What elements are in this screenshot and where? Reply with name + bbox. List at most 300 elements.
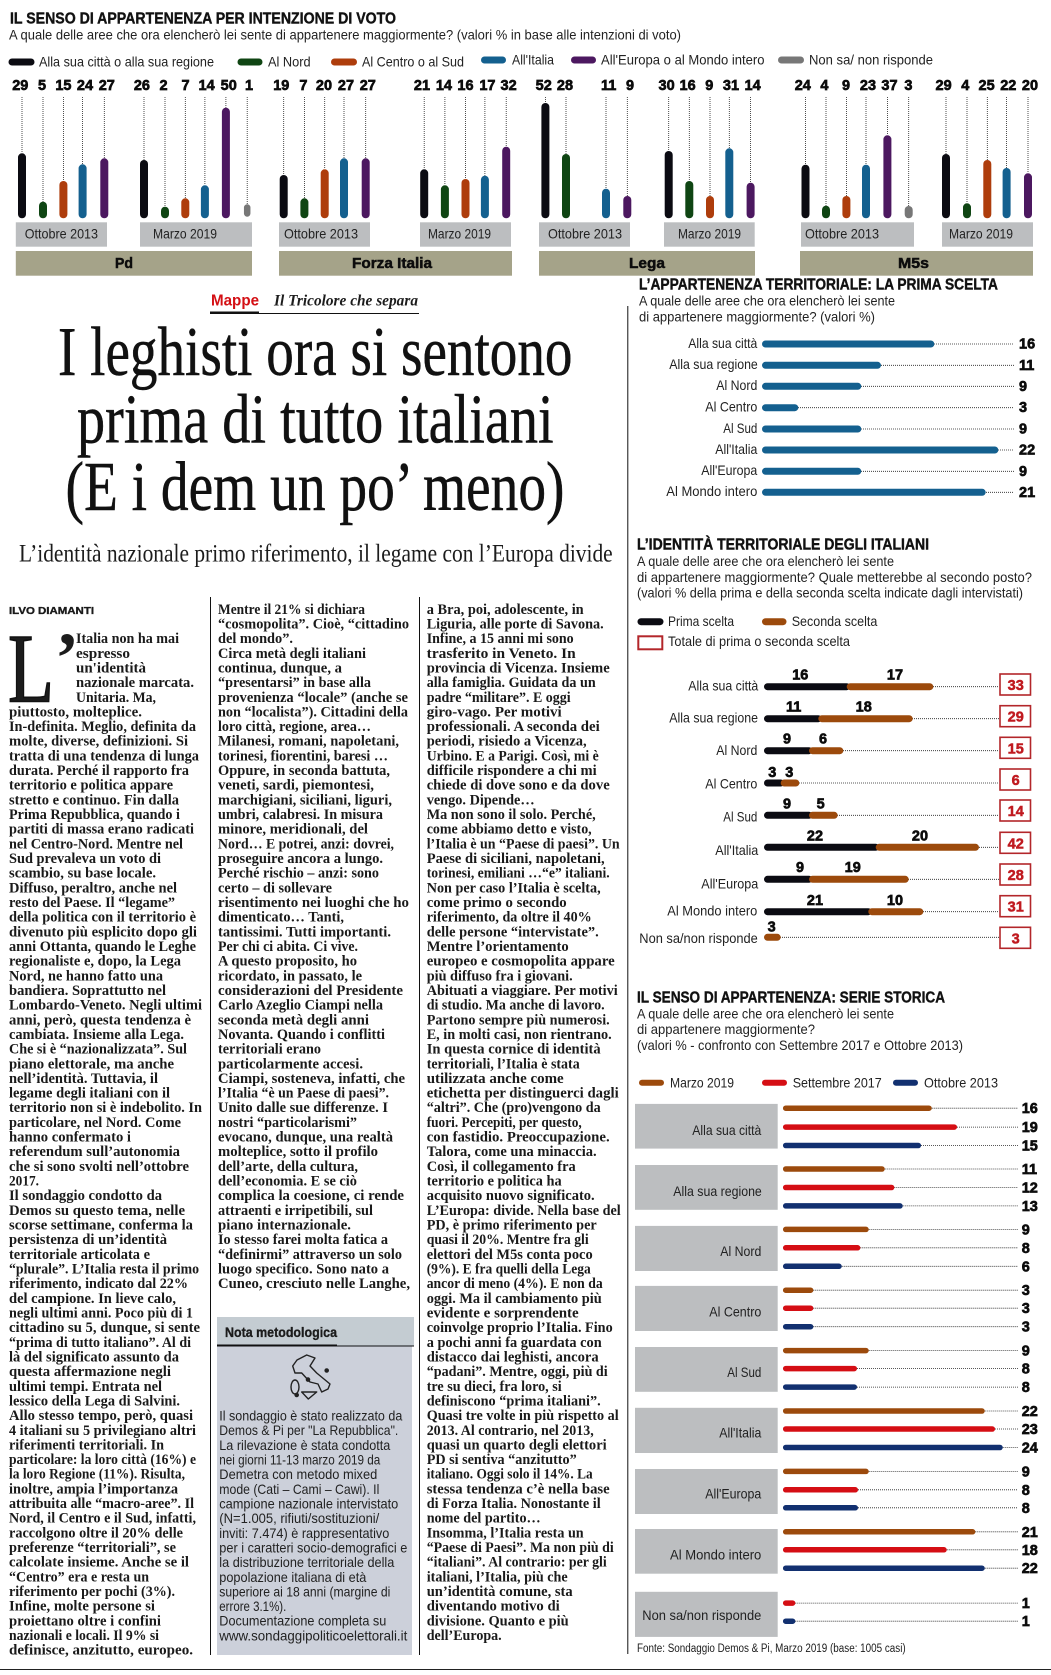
article column 2: provenienza “locale” (anche se — [218, 690, 408, 706]
article column 3: quasi un quarto degli elettori — [427, 1437, 607, 1453]
bars: M5s: 9 — [842, 78, 850, 94]
article column 2 — [218, 602, 410, 1292]
heading: territorial identity: (valori % della prima e della seconda scelta indicate dagli intervistati) — [637, 584, 1023, 600]
bar chart: first choice: Al Centro — [705, 398, 757, 414]
legend: first and second choice — [638, 613, 877, 649]
legend: voting intention: All'Italia — [512, 52, 554, 68]
bar chart: historical series: 6 — [1022, 1259, 1030, 1275]
total boxes: 6 — [1012, 773, 1020, 789]
bar chart: historical series: 3 — [1022, 1320, 1030, 1336]
note text: inviti: 7.474) è rappresentativo — [219, 1525, 389, 1541]
kicker: Mappe: Il Tricolore che separa — [273, 292, 418, 310]
legend: voting intention: Non sa/ non risponde — [809, 52, 933, 68]
heading: voting intention: IL SENSO DI APPARTENENZA PER INTENZIONE DI VOTO — [10, 11, 396, 28]
bar chart: first and second choice: 10 — [887, 893, 903, 909]
bars: Pd: 5 — [38, 78, 46, 94]
bars: M5s: 37 — [881, 78, 898, 94]
article column 3: Insomma, l’Italia resta un — [427, 1525, 584, 1541]
bar chart: historical series: 8 — [1022, 1501, 1030, 1517]
article column 1: della politica con il territorio è — [9, 910, 196, 926]
panel: methodological note — [217, 1317, 414, 1655]
article column 3: provincia di Vicenza. Insieme — [427, 660, 610, 676]
article column 1: Lombardo-Veneto. Negli ultimi — [9, 998, 202, 1014]
bars: Pd: 24 — [77, 78, 93, 94]
bar chart: first choice: Al Sud — [723, 420, 757, 436]
article column 2: “presentarsi” in base alla — [218, 675, 371, 691]
article column 3: evidente e sorprendente — [427, 1305, 579, 1321]
article column 1: 4 italiani su 5 privilegiano altri — [9, 1423, 196, 1439]
drop cap: L — [8, 615, 54, 724]
article column 3: italiano. Oggi solo il 14%. La — [427, 1467, 593, 1483]
article column 1: scambio, su base locale. — [9, 866, 156, 882]
bars: Forza Italia: Ottobre 2013 — [284, 226, 358, 242]
legend: voting intention: Al Centro o al Sud — [362, 54, 464, 70]
row panels: Al Mondo intero — [670, 1546, 761, 1562]
article column 1: riferimento per pochi (3%). — [9, 1584, 175, 1600]
bar chart: first and second choice: 11 — [786, 700, 801, 716]
article column 1: “prima di tutto italiano”. Al di — [9, 1335, 191, 1351]
bars: Forza Italia: 21 — [414, 78, 430, 94]
note text: Documentazione completa su — [219, 1613, 386, 1629]
article column 1: nell’identità. Tuttavia, il — [9, 1071, 158, 1087]
article column 1: territorio non si è indebolito. In — [9, 1100, 203, 1116]
bar chart: first and second choice: 6 — [819, 731, 827, 747]
bar chart: historical series: 9 — [1022, 1464, 1030, 1480]
bars: Pd: 26 — [134, 78, 150, 94]
article column 3: come primo o secondo — [427, 895, 567, 911]
article column 3: 2013. Al contrario, nel 2013, — [427, 1423, 594, 1439]
bar chart: first and second choice: Alla sua città — [688, 678, 758, 694]
article column 3: Abituati a viaggiare. Per motivi — [427, 983, 618, 999]
article column 1: referendum sull’autonomia — [9, 1144, 180, 1160]
bars: M5s: 25 — [979, 78, 995, 94]
drop cap: ’ — [55, 618, 79, 698]
note text: errore 3.1%). — [219, 1598, 286, 1614]
bar chart: first and second choice: 5 — [817, 796, 825, 812]
bars: Forza Italia: Marzo 2019 — [428, 226, 491, 242]
article column 1: “plurale”. L’Italia resta il primo — [9, 1261, 199, 1277]
bar chart: historical series: 8 — [1022, 1483, 1030, 1499]
bars: M5s: 23 — [860, 78, 876, 94]
bar chart: first choice: All'Europa — [701, 462, 757, 478]
article column 2: Cuneo, cresciuto nelle Langhe, — [218, 1276, 410, 1292]
note heading: Nota metodologica — [225, 1324, 337, 1340]
article column 1: stretto e continuo. Fin dalla — [9, 792, 179, 808]
article column 3: alla famiglia. Guidata da un — [427, 675, 596, 691]
article column 2: loro città, regione, area… — [218, 719, 371, 735]
total boxes: 31 — [1008, 900, 1024, 916]
article column 1: preferenze “territoriali”, se — [9, 1540, 176, 1556]
article column 2: Io stesso farei molta fatica a — [218, 1232, 388, 1248]
article column 1: legame degli italiani con il — [9, 1086, 170, 1102]
bars: Lega: 28 — [557, 78, 573, 94]
bar chart: historical series: 18 — [1022, 1543, 1038, 1559]
note text: Il sondaggio è stato realizzato da — [219, 1408, 402, 1424]
bars: M5s: M5s — [898, 255, 929, 272]
article column 2: considerazioni del Presidente — [218, 983, 403, 999]
total boxes: 14 — [1008, 804, 1024, 820]
bars: Forza Italia: 32 — [501, 78, 517, 94]
heading: voting intention: A quale delle aree che ora elencherò lei sente di appartenere maggiormente? (valori % in base alle intenzioni di voto) — [9, 27, 681, 43]
article column 3: come abbiamo detto e visto, — [427, 822, 592, 838]
article column 3: Non per caso l’Italia è scelta, — [427, 880, 601, 896]
bars: M5s — [795, 78, 1038, 276]
bar chart: historical series: 12 — [1022, 1180, 1038, 1196]
bar chart: first and second choice — [639, 667, 999, 946]
bars: Forza Italia: 20 — [316, 78, 332, 94]
article column 3: divisione. Quanto e più — [427, 1613, 569, 1629]
article column 1: espresso — [76, 646, 130, 662]
article column 1: lessico della Lega di Salvini. — [9, 1393, 180, 1409]
heading: historical series — [637, 989, 963, 1053]
heading: historical series: IL SENSO DI APPARTENENZA: SERIE STORICA — [637, 989, 945, 1006]
bar chart: historical series: 11 — [1022, 1162, 1037, 1178]
bar chart: first choice — [666, 335, 1035, 501]
article column 1: Prima Repubblica, quando i — [9, 807, 180, 823]
article column 3: difficile rispondere a chi mi — [427, 763, 597, 779]
article column 3: di Forza Italia. Nonostante il — [427, 1496, 601, 1512]
article column 1: anni Ottanta, quando le Leghe — [9, 939, 196, 955]
heading: first choice — [639, 276, 998, 325]
total boxes: 15 — [1008, 741, 1024, 757]
legend: dates: Settembre 2017 — [793, 1074, 882, 1090]
article column 1: territorio e politica appare — [9, 778, 173, 794]
bars: Lega: Marzo 2019 — [678, 226, 741, 242]
article column 2: tantissimi. Tutti importanti. — [218, 924, 391, 940]
bars: Forza Italia: 27 — [338, 78, 354, 94]
bar chart: first and second choice: 9 — [783, 731, 791, 747]
article column 3: torinesi, emiliani …“e” italiani. — [427, 866, 610, 882]
bar chart: first and second choice: Al Mondo intero — [667, 902, 757, 918]
bars: Pd: 27 — [99, 78, 115, 94]
bars: Pd: 2 — [160, 78, 168, 94]
bar chart: historical series: 19 — [1022, 1120, 1038, 1136]
article column 2: Nord… E potrei, anzi: dovrei, — [218, 836, 394, 852]
article column 2: Mentre il 21% si dichiara — [218, 602, 365, 618]
bar chart: historical series: 22 — [1022, 1404, 1038, 1420]
bars: M5s: 29 — [936, 78, 952, 94]
article column 3: con fastidio. Preoccupazione. — [427, 1130, 610, 1146]
row panels: Al Nord — [720, 1243, 761, 1259]
bars: Lega: 16 — [680, 78, 696, 94]
bars: Lega: 14 — [745, 78, 761, 94]
note text: Demetra con metodo mixed — [219, 1466, 377, 1482]
article column 3: Paese di siciliani, napoletani, — [427, 851, 605, 867]
total boxes — [1000, 674, 1030, 948]
article column 2: veneti, sardi, piemontesi, — [218, 778, 374, 794]
bar chart: first and second choice: 20 — [912, 828, 928, 844]
total boxes: 3 — [1012, 931, 1020, 947]
article column 3: Così, il collegamento fra — [427, 1159, 576, 1175]
row panels: All'Italia — [719, 1424, 761, 1440]
bar chart: historical series: 13 — [1022, 1199, 1038, 1215]
bars: Lega: 52 — [536, 78, 552, 94]
article column 2: evocano, dunque, una realtà — [218, 1130, 393, 1146]
article column 2: molteplice, sotto il profilo — [218, 1144, 378, 1160]
article column 2: non “localista”). Cittadini della — [218, 704, 408, 720]
article column 3: distacco dai leghisti, ancora — [427, 1349, 599, 1365]
bars: Pd: 1 — [245, 78, 253, 94]
article column 3: Ma non sono il solo. Perché, — [427, 807, 596, 823]
bar chart: first choice: 21 — [1019, 485, 1035, 501]
bars: Forza Italia: 17 — [479, 78, 495, 94]
bar chart: historical series: 8 — [1022, 1241, 1030, 1257]
article column 3: vengo. Dipende… — [427, 792, 535, 808]
article column 1: partiti di massa erano radicati — [9, 822, 194, 838]
article column 1: calcolate insieme. Anche se il — [9, 1555, 189, 1571]
article column 1: definisce, anzitutto, europeo. — [9, 1643, 193, 1659]
bar chart: historical series: 21 — [1022, 1525, 1038, 1541]
row panels: Non sa/non risponde — [642, 1607, 761, 1623]
article column 3 — [427, 602, 621, 1644]
article column 1: In-definita. Meglio, definita da — [9, 719, 196, 735]
bar chart: historical series: 8 — [1022, 1362, 1030, 1378]
bars: Pd — [12, 78, 253, 276]
article column 3: “padani”. Mentre, oggi, più di — [427, 1364, 608, 1380]
article column 3: Infine, a 15 anni mi sono — [427, 631, 574, 647]
bars: Forza Italia: 16 — [457, 78, 474, 94]
bars: Lega: Ottobre 2013 — [548, 226, 622, 242]
article column 1: proiettano oltre i confini — [9, 1613, 161, 1629]
heading: territorial identity: L’IDENTITÀ TERRITORIALE DEGLI ITALIANI — [637, 534, 929, 553]
article column 1: nazionali e locali. Il 9% si — [9, 1628, 159, 1644]
bar chart: first and second choice: Al Sud — [723, 809, 757, 825]
heading: territorial identity: di appartenere maggiormente? Quale metterebbe al secondo posto? — [637, 569, 1032, 585]
article column 1: ultimi tempi. Entrata nel — [9, 1379, 162, 1395]
bars: Forza Italia: 27 — [360, 78, 376, 94]
article column 1: anni, però, questa tendenza è — [9, 1012, 191, 1028]
bar chart: historical series: 1 — [1022, 1596, 1030, 1612]
legend: voting intention: Alla sua città o alla sua regione — [39, 54, 214, 70]
legend: voting intention — [12, 52, 933, 70]
article column 2: ricordato, in passato, le — [218, 968, 362, 984]
total boxes: 28 — [1008, 868, 1024, 884]
bar chart: first and second choice: Al Centro — [705, 775, 757, 791]
article column 3: etichetta per distinguerci dagli — [427, 1086, 619, 1102]
panel: territorial identity chart — [637, 534, 1032, 948]
panel: first choice chart — [639, 276, 1035, 501]
legend: voting intention: All'Europa o al Mondo intero — [601, 52, 765, 68]
bar chart: first and second choice: 21 — [807, 893, 823, 909]
article column 3: chiede di dove sono e da dove — [427, 778, 610, 794]
bar chart: historical series: 24 — [1022, 1440, 1038, 1456]
article column 1: tratta di una tendenza di lunga — [9, 748, 199, 764]
legend: voting intention: Al Nord — [268, 54, 311, 70]
article column 1: molte, diverse, definizioni. Si — [9, 734, 188, 750]
article column 1: Diffuso, peraltro, anche nel — [9, 880, 177, 896]
article column 1: resto del Paese. Il “legame” — [9, 895, 175, 911]
article column 1: nazionale marcata. — [76, 675, 194, 691]
legend: first and second choice: Totale di prima o seconda scelta — [668, 633, 850, 649]
article column 1: particolare, nel Nord. Come — [9, 1115, 181, 1131]
article column 1: riferimenti territoriali. In — [9, 1437, 165, 1453]
article column 1: Demos su questo tema, nelle — [9, 1203, 185, 1219]
bars: Pd: 15 — [55, 78, 71, 94]
bar chart: first and second choice: 16 — [792, 667, 808, 683]
headline: prima di tutto italiani — [77, 382, 554, 459]
bars: Forza Italia: 19 — [273, 78, 289, 94]
article column 3: In questa cornice di identità — [427, 1042, 601, 1058]
note text: popolazione italiana di età — [219, 1569, 366, 1585]
article column 3: Urbino. E a Parigi. Così, mi è — [427, 748, 599, 764]
article column 1: cambiata. Insieme alla Lega. — [9, 1027, 184, 1043]
article column 2: nostri “particolarismi” — [218, 1115, 357, 1131]
article column 2: risentimento nei luoghi che ho — [218, 895, 409, 911]
bar chart: first and second choice: 18 — [856, 700, 872, 716]
source note: Fonte: Sondaggio Demos & Pi, Marzo 2019 (base: 1005 casi) — [637, 1643, 906, 1655]
article column 1: regionaliste e, dopo, la Lega — [9, 954, 181, 970]
bars: Forza Italia: 14 — [436, 78, 452, 94]
heading: historical series: A quale delle aree che ora elencherò lei sente — [637, 1005, 894, 1021]
heading: historical series: (valori % - confronto con Settembre 2017 e Ottobre 2013) — [637, 1037, 963, 1053]
article column 2: Ciampi, sosteneva, infatti, che — [218, 1071, 405, 1087]
heading: first choice: L’APPARTENENZA TERRITORIALE: LA PRIMA SCELTA — [639, 276, 998, 293]
heading: historical series: di appartenere maggiormente? — [637, 1021, 815, 1037]
headline: (E i dem un po’ meno) — [66, 449, 564, 526]
heading: voting intention — [9, 11, 681, 43]
bar chart: first and second choice: 22 — [807, 828, 823, 844]
bars: Pd: 29 — [12, 78, 28, 94]
bar chart: historical series: 9 — [1022, 1222, 1030, 1238]
article column 1: Il sondaggio condotto da — [9, 1188, 162, 1204]
article column 2: Per chi ci abita. Ci vive. — [218, 939, 358, 955]
legend: dates: Marzo 2019 — [670, 1074, 734, 1090]
note text: campione nazionale intervistato — [219, 1496, 398, 1512]
article column 1: riferimento, indicato dal 22% — [9, 1276, 188, 1292]
row panels: Al Centro — [709, 1304, 761, 1320]
article column 1: Unitaria. Ma, — [76, 690, 156, 706]
bars: Lega: 9 — [626, 78, 634, 94]
article column 1: che si sono svolti nell’ottobre — [9, 1159, 189, 1175]
total boxes: 33 — [1008, 678, 1024, 694]
row panels: Al Sud — [727, 1364, 761, 1380]
panel: voting intention chart — [9, 11, 1038, 276]
article column 2: minore, meridionali, del — [218, 822, 368, 838]
bar chart: historical series: 8 — [1022, 1380, 1030, 1396]
bar chart: historical series: 9 — [1022, 1344, 1030, 1360]
article column 3: PD si sentiva “anzitutto” — [427, 1452, 577, 1468]
article column 3: elettori del M5s conta poco — [427, 1247, 593, 1263]
article column 1: raccolgono oltre il 20% delle — [9, 1525, 183, 1541]
article column 3: Quasi tre volte in più rispetto al — [427, 1408, 619, 1424]
bars: M5s: 24 — [795, 78, 811, 94]
article column 1: “Centro” era e resta un — [9, 1569, 150, 1585]
kicker: Mappe — [210, 292, 419, 314]
headline: I leghisti ora si sentono — [58, 314, 572, 391]
article column 1: scorse settimane, conferma la — [9, 1217, 193, 1233]
legend: first and second choice: Seconda scelta — [792, 613, 877, 629]
article column 2: A questo proposito, ho — [218, 954, 357, 970]
article column 3: territoriali, l’Italia è stata — [427, 1056, 580, 1072]
article column 3: L’Europa: divide. Nella base del — [427, 1203, 621, 1219]
bar chart: first choice: 3 — [1019, 400, 1027, 416]
bars: Pd: 7 — [182, 78, 190, 94]
article column 2: Circa metà degli italiani — [218, 646, 366, 662]
bar chart: first choice: All'Italia — [715, 441, 757, 457]
article column 1: divenuto più esplicito dopo gli — [9, 924, 197, 940]
bar chart: first choice: 11 — [1019, 358, 1034, 374]
article column 3: a pochi anni fa guardata con — [427, 1335, 602, 1351]
bar chart: first and second choice: 3 — [768, 765, 776, 781]
bar chart: first choice: 9 — [1019, 464, 1027, 480]
bars: Pd: Ottobre 2013 — [25, 226, 98, 242]
article column 2: Milanesi, romani, napoletani, — [218, 734, 399, 750]
legend: dates: Ottobre 2013 — [924, 1074, 998, 1090]
bar chart: first choice: 9 — [1019, 379, 1027, 395]
note text: mode (Cati – Cami – Cawi). Il — [219, 1481, 379, 1497]
article column 3: l’Italia è un “Paese di paesi”. Un — [427, 836, 620, 852]
article column 3: tre su dieci, fra loro, si — [427, 1379, 562, 1395]
bar chart: first and second choice: 9 — [796, 860, 804, 876]
article column 3: quasi il 20%. Mentre fra gli — [427, 1232, 589, 1248]
article column 2: territoriali erano — [218, 1042, 321, 1058]
article column 3: ancor di meno (4%). E non da — [427, 1276, 603, 1292]
article column 1: negli ultimi anni. Poco più di 1 — [9, 1305, 193, 1321]
bar chart: historical series: 15 — [1022, 1138, 1038, 1154]
article column 1: piano elettorale, ma anche — [9, 1056, 174, 1072]
article column 1: questa affermazione negli — [9, 1364, 171, 1380]
bars: Pd: Pd — [115, 255, 133, 272]
article column 3: a Bra, poi, adolescente, in — [427, 602, 584, 618]
article column 2: dell’economia. E se ciò — [218, 1173, 357, 1189]
note text: per i caratteri socio-demografici e — [219, 1539, 407, 1555]
subheadline: L’identità nazionale primo riferimento, il legame con l’Europa divide — [19, 541, 613, 568]
heading: territorial identity: A quale delle aree che ora elencherò lei sente — [637, 553, 894, 569]
bar chart: first and second choice: 9 — [783, 796, 791, 812]
article column 1: la loro Regione (11%). Risulta, — [9, 1467, 185, 1483]
headline — [58, 314, 572, 526]
row panels: Alla sua città — [692, 1122, 761, 1138]
article column 1: nel Centro-Nord. Mentre nel — [9, 836, 183, 852]
bar chart: historical series — [786, 1101, 1038, 1630]
article column 2: piano internazionale. — [218, 1217, 351, 1233]
article column 2: Perché rischio – anzi: sono — [218, 866, 379, 882]
bars: Pd: 14 — [199, 78, 215, 94]
article column 2: l’Italia “è un Paese di paesi”. — [218, 1086, 389, 1102]
article column 3: fuori. Percepiti, per questo, — [427, 1115, 582, 1131]
article column 2: Unito dalle sue differenze. I — [218, 1100, 388, 1116]
bars: Pd: Marzo 2019 — [153, 226, 217, 242]
article column 2: dell’arte, della cultura, — [218, 1159, 358, 1175]
bars: Lega: 9 — [705, 78, 713, 94]
note text — [218, 1408, 407, 1643]
article column 3: stessa tendenza c’è nella base — [427, 1481, 610, 1497]
legend: dates — [642, 1074, 998, 1090]
article column 3: italiani, l’Italia, più che — [427, 1569, 568, 1585]
bar chart: first and second choice: 3 — [768, 920, 776, 936]
article column 3: periodi, risiedo a Vicenza, — [427, 734, 587, 750]
article column 1: bandiera. Soprattutto nel — [9, 983, 166, 999]
bar chart: historical series: 23 — [1022, 1422, 1038, 1438]
total boxes: 29 — [1008, 710, 1024, 726]
bars: M5s: 4 — [820, 78, 828, 94]
article column 1: Che si è “nazionalizzata”. Sul — [9, 1042, 187, 1058]
article column 2: Novanta. Quando i conflitti — [218, 1027, 385, 1043]
heading: first choice: A quale delle aree che ora elencherò lei sente — [639, 293, 895, 309]
article column 3: “altri”. Che (pro)vengono da — [427, 1100, 601, 1116]
article column 1: là del significato assunto da — [9, 1349, 179, 1365]
article column 2: torinesi, fiorentini, baresi … — [218, 748, 388, 764]
heading: territorial identity — [637, 534, 1032, 600]
article column 3: di studio. Ma anche di lavoro. — [427, 998, 605, 1014]
article column 2: luogo specifico. Sono nato a — [218, 1261, 389, 1277]
article column 3: professionali. A seconda dei — [427, 719, 600, 735]
bars: Pd: 50 — [221, 78, 237, 94]
bar chart: historical series: 3 — [1022, 1301, 1030, 1317]
article column 2: umbri, calabresi. In misura — [218, 807, 383, 823]
heading: first choice: di appartenere maggiormente? (valori %) — [639, 309, 875, 325]
article column 3: acquisito nuovo significato. — [427, 1188, 595, 1204]
